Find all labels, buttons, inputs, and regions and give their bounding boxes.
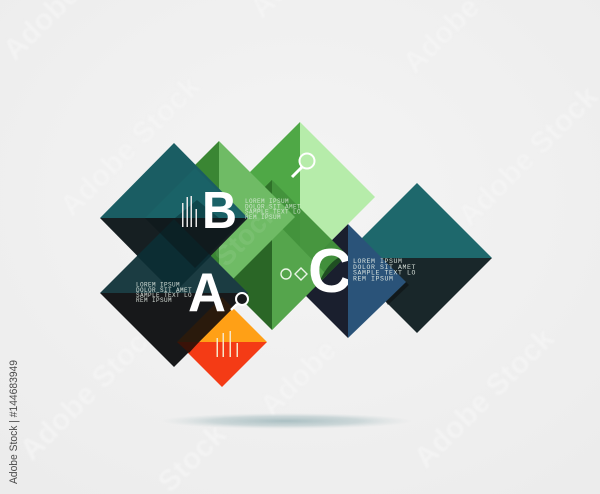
text block A: [136, 282, 192, 304]
text block B: DOLOR SIT AMET: [245, 203, 301, 210]
diamond: teal upper left (B): [100, 143, 248, 293]
diamond: dark green lower centre: [197, 180, 347, 330]
text block C: [353, 258, 416, 282]
diamond: central green: [143, 141, 295, 293]
icon: circle and diamond: [281, 268, 307, 280]
letter A: A: [188, 261, 226, 323]
text block B: [245, 198, 301, 221]
text block A: DOLOR SIT AMET: [136, 287, 192, 294]
icon: magnifier by letter A: [231, 293, 248, 310]
diamond: navy left half: [291, 224, 348, 338]
ground shadow: [161, 413, 411, 429]
text block B: SAMPLE TEXT LO: [245, 209, 301, 216]
diamond: orange and red: [177, 297, 267, 387]
diamond: blue right half: [348, 224, 409, 338]
vertical stock id: Adobe Stock | #144683949: [8, 360, 20, 484]
text block C: SAMPLE TEXT LO: [353, 270, 416, 277]
watermarks: Adobe: [254, 334, 343, 423]
text block A: LOREM IPSUM: [136, 282, 180, 288]
watermarks: Adobe Stock: [14, 314, 167, 467]
watermarks: Adobe Stock: [54, 70, 207, 223]
text block C: REM IPSUM: [353, 275, 394, 282]
letter B: B: [202, 182, 237, 240]
diamond: dark lower left (A): [100, 219, 248, 367]
letter C: C: [308, 237, 352, 306]
text block B: LOREM IPSUM: [245, 198, 289, 205]
icon: bars on orange: [216, 331, 238, 357]
text block C: LOREM IPSUM: [353, 258, 403, 265]
text block C: DOLOR SIT AMET: [353, 264, 416, 271]
diamond: right teal: [342, 183, 492, 333]
faint watermark over shapes: Stock: [208, 196, 284, 272]
diamond: light green top right: [225, 122, 375, 272]
text block A: SAMPLE TEXT LO: [136, 292, 192, 299]
text block A: REM IPSUM: [136, 297, 172, 304]
icon: bars beside B: [182, 196, 197, 227]
text block B: REM IPSUM: [245, 214, 281, 221]
icon: magnifier on light green: [292, 154, 314, 177]
watermarks: Adobe Stock: [408, 322, 561, 475]
